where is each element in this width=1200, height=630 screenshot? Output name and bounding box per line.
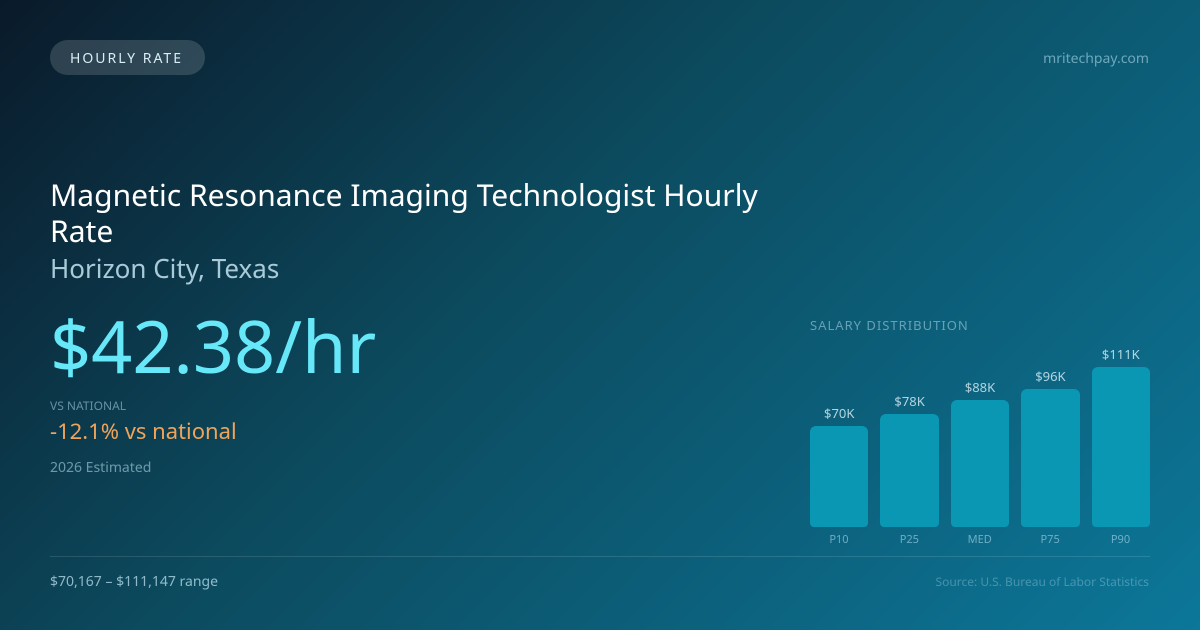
comparison label: VS NATIONAL bbox=[50, 397, 126, 414]
bar group: P75: $96K bbox=[1035, 367, 1066, 385]
source: Source: U.S. Bureau of Labor Statistics bbox=[936, 573, 1149, 590]
site name: mritechpay.com bbox=[1043, 49, 1149, 68]
bar group: P25 bbox=[880, 392, 939, 547]
bar group: P90: $111K bbox=[1102, 345, 1140, 363]
bar group: P10 bbox=[810, 404, 868, 547]
panel: salary distribution chart bbox=[810, 316, 1150, 547]
main value: $42.38/hr bbox=[50, 297, 376, 395]
bar group: P10: $70K bbox=[824, 404, 854, 422]
bar group: P25: P25 bbox=[900, 532, 919, 547]
subtitle: location: Horizon City, Texas bbox=[50, 250, 279, 286]
bar group: P25: $78K bbox=[894, 392, 925, 410]
bar group: P75 bbox=[1021, 367, 1080, 547]
bar group: P75: P75 bbox=[1040, 532, 1060, 547]
bar group: median: $88K bbox=[965, 378, 995, 396]
comparison value: -12.1% vs national bbox=[50, 416, 237, 446]
badge: hourly rate: HOURLY RATE bbox=[70, 49, 183, 68]
badge: hourly rate bbox=[50, 40, 205, 75]
year note: 2026 Estimated bbox=[50, 458, 151, 477]
bar group: P10: P10 bbox=[829, 532, 849, 547]
bar group: median bbox=[951, 378, 1009, 547]
bar group: median: MED bbox=[968, 532, 992, 547]
salary range: $70,167 – $111,147 range bbox=[50, 572, 218, 591]
bar group: P90: P90 bbox=[1111, 532, 1130, 547]
chart heading: SALARY DISTRIBUTION bbox=[810, 316, 969, 334]
title: Magnetic Resonance Imaging Technologist Hourly Rate bbox=[50, 174, 758, 251]
bar group: P90 bbox=[1092, 345, 1150, 547]
